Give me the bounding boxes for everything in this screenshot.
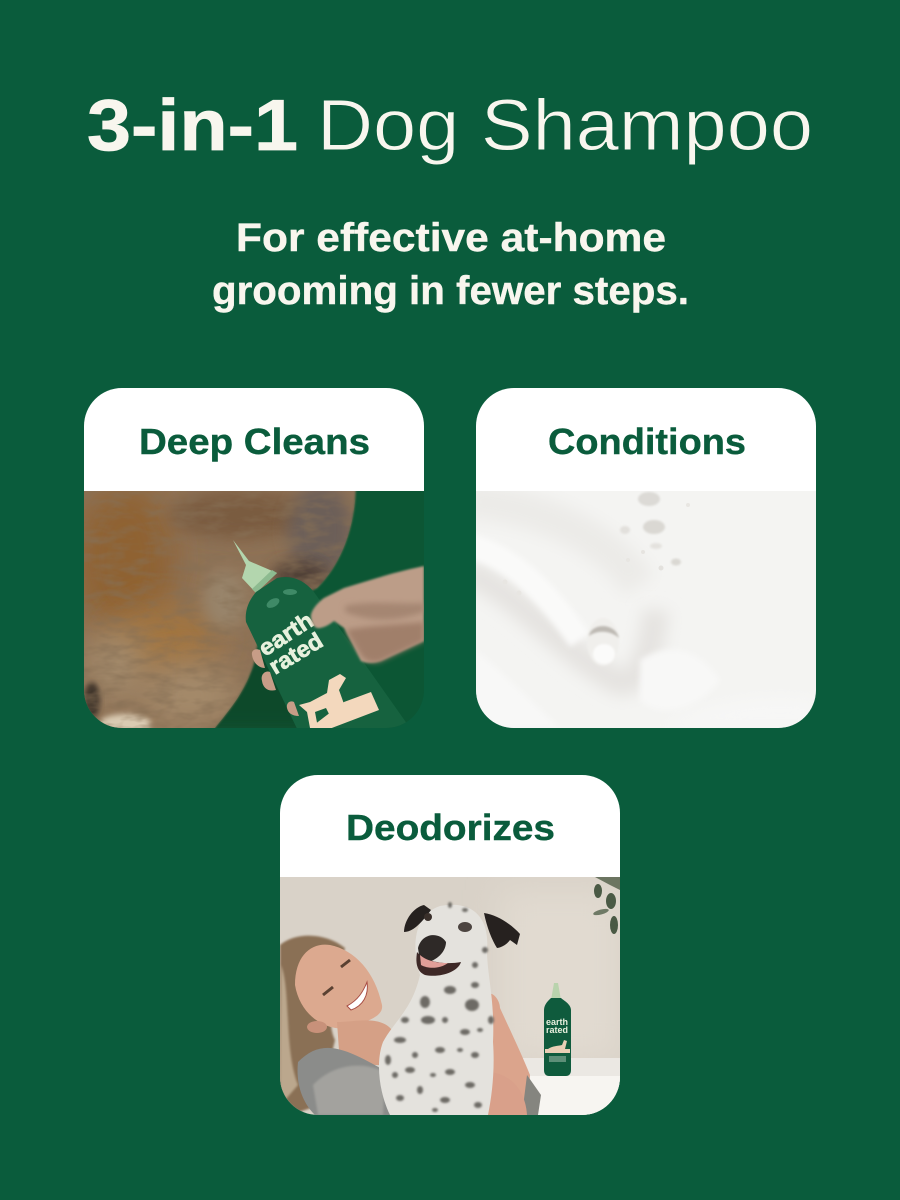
heading: conditions: Conditions	[548, 421, 746, 462]
title: Dog Shampoo	[317, 86, 813, 166]
product label dog	[299, 674, 379, 734]
bathtub	[520, 1058, 620, 1115]
subtitle: grooming in fewer steps.	[212, 269, 689, 313]
infographic canvas	[84, 97, 816, 1115]
product logo: rated	[264, 627, 327, 679]
dog fur	[84, 491, 358, 728]
icon: spotted dog	[379, 902, 520, 1115]
title	[87, 86, 813, 166]
icon: small shampoo bottle	[544, 983, 571, 1076]
icon: shampoo bottle	[233, 540, 415, 735]
icon: woman	[280, 936, 541, 1115]
product logo	[260, 615, 324, 675]
product logo: earth	[254, 607, 318, 661]
icon: small shampoo bottle: rated	[546, 1025, 568, 1035]
photo: woman with dog	[280, 877, 620, 1116]
icon: plant	[593, 877, 620, 934]
photo: shampoo on dog fur	[84, 491, 424, 728]
dog spots	[385, 902, 494, 1112]
title: 3-in-1	[87, 86, 298, 166]
panel: conditions	[466, 388, 816, 728]
icon: hand holding bottle	[252, 566, 424, 716]
subtitle	[212, 216, 689, 313]
panel: deep cleans	[70, 388, 424, 740]
icon: small shampoo bottle: earth	[546, 1017, 568, 1027]
photo: shampoo foam	[466, 491, 816, 728]
panel: deodorizes	[280, 775, 620, 1116]
heading: deep cleans: Deep Cleans	[139, 421, 370, 462]
heading: deodorizes: Deodorizes	[346, 807, 555, 848]
bubbles	[502, 492, 690, 666]
subtitle: For effective at-home	[236, 216, 666, 260]
